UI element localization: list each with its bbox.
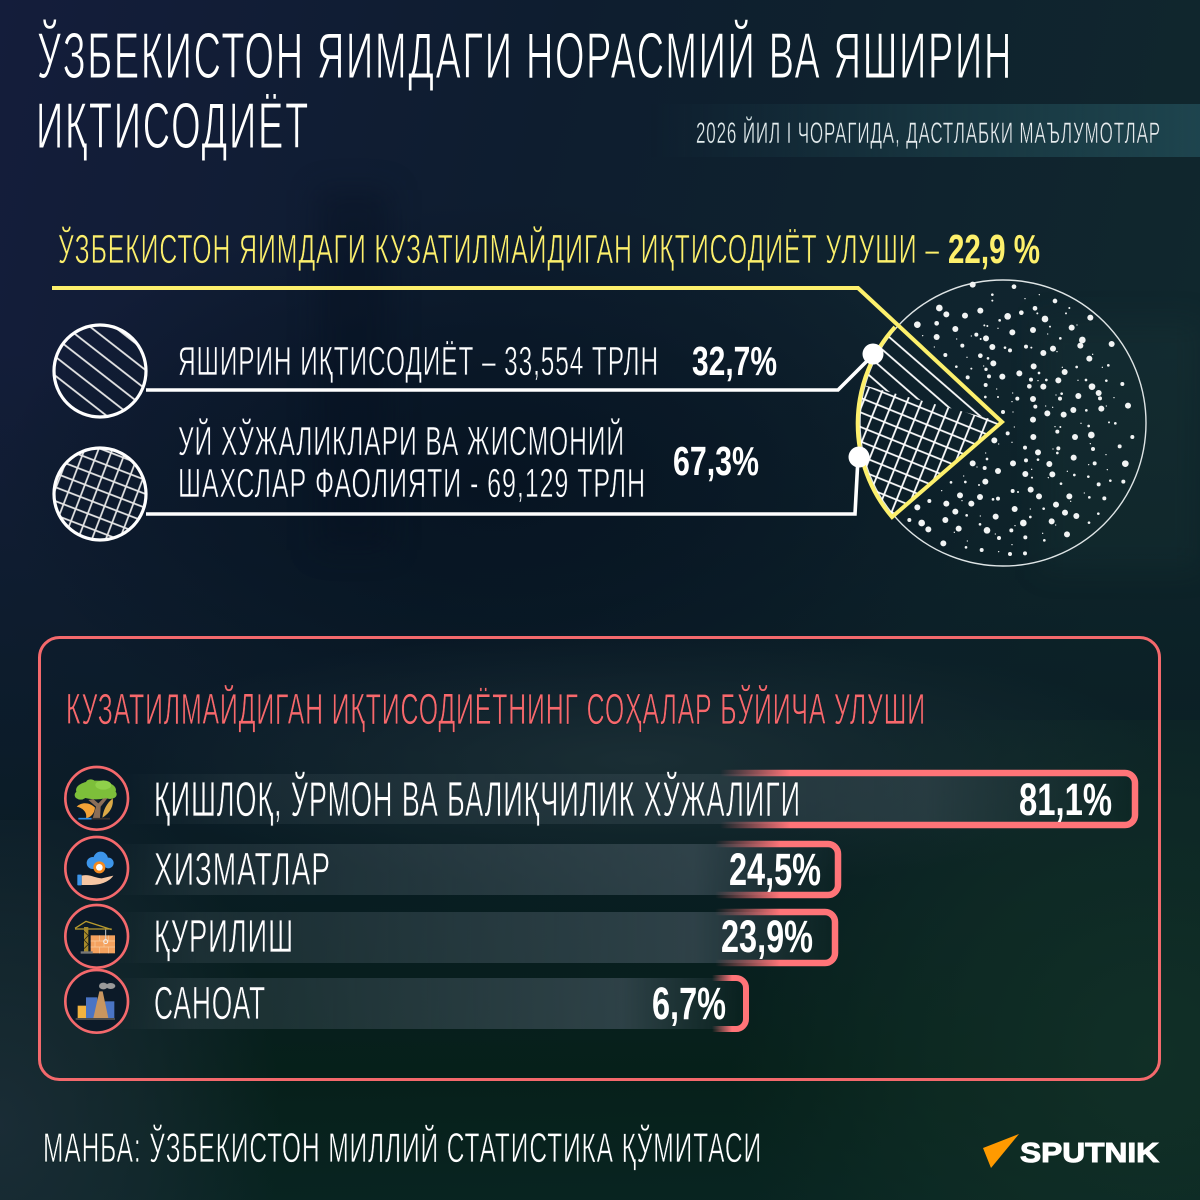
yellow slice outline and leader line xyxy=(52,288,1002,517)
hatched legend circle xyxy=(54,448,146,540)
label: ЯШИРИН ИҚТИСОДИЁТ – 33,554 ТРЛН xyxy=(178,338,659,384)
pie outline xyxy=(860,280,1146,566)
bar: services: 24,5% xyxy=(729,844,821,895)
value: 32,7% xyxy=(692,338,777,384)
bar: industry: САНОАТ xyxy=(154,977,266,1029)
label: ШАХСЛАР ФАОЛИЯТИ - 69,129 ТРЛН xyxy=(178,460,646,506)
title: ИҚТИСОДИЁТ xyxy=(36,89,310,162)
icon: factory xyxy=(65,970,128,1033)
pie chart xyxy=(52,280,1146,566)
legend: households and individuals xyxy=(54,417,870,540)
household activity wedge (hatched) xyxy=(858,385,1002,517)
value: 67,3% xyxy=(673,438,759,484)
label: УЙ ХЎЖАЛИКЛАРИ ВА ЖИСМОНИЙ xyxy=(178,417,625,464)
bar: construction: ҚУРИЛИШ xyxy=(154,910,294,962)
logo: Sputnik xyxy=(983,1134,1159,1168)
bar: industry: 6,7% xyxy=(652,978,726,1029)
heading: unobserved economy share: 22,9 % xyxy=(948,226,1040,272)
leader line xyxy=(146,458,858,514)
legend: hidden economy xyxy=(54,325,884,417)
label xyxy=(178,417,646,506)
bar: construction xyxy=(110,910,840,963)
logo wordmark: SPUTNIK xyxy=(1020,1137,1159,1168)
subtitle ribbon xyxy=(650,104,1200,157)
bar: services xyxy=(110,843,840,895)
striped legend circle xyxy=(54,325,146,417)
pie dots xyxy=(907,282,1134,556)
bar: services: ХИЗМАТЛАР xyxy=(154,843,331,895)
bar: construction: 23,9% xyxy=(721,911,813,962)
bar: industry xyxy=(110,977,750,1029)
icon: service hand and cloud xyxy=(65,837,128,900)
leader line xyxy=(146,355,873,390)
icon: tree, fish and wheat xyxy=(65,767,128,830)
hidden economy wedge (striped) xyxy=(863,327,1002,422)
leader dot xyxy=(848,446,870,468)
bar: agriculture: 81,1% xyxy=(1019,774,1112,825)
icon: crane and brick wall xyxy=(65,905,128,968)
panel: shares by sector xyxy=(40,638,1160,1080)
logo arrow xyxy=(983,1134,1019,1168)
title xyxy=(36,19,1013,162)
leader dot xyxy=(862,344,884,364)
panel border xyxy=(40,638,1160,1080)
